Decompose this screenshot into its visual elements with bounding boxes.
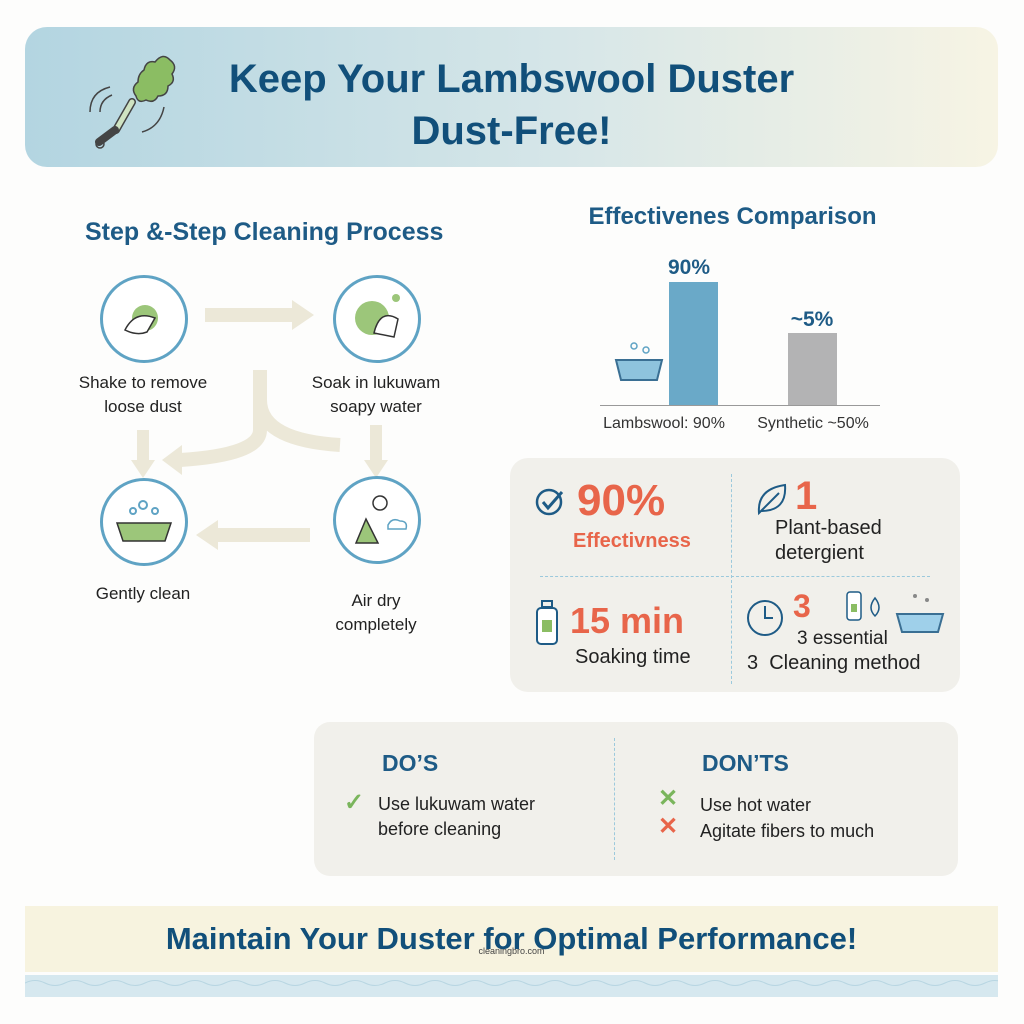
dos: ✓ [344,789,364,816]
step 4: air dry: Air dry [351,591,401,610]
panel: stats [510,458,960,692]
stat: 90%: 90% [577,476,665,525]
stat: 3 methods [747,588,944,674]
stat: 90% [536,476,691,552]
icon: basin [100,478,188,566]
stat: plant-based: Plant-based [775,517,882,539]
donts: DON’TS [702,750,789,776]
stat: 3 methods: 3 essential [797,628,888,649]
stat: 3 methods: 3 Cleaning method [747,652,920,674]
footer banner: cleaningbro.com [478,946,545,956]
decorative waves [25,975,998,997]
step 3: gently clean: Gently clean [96,584,190,603]
donts [658,750,874,841]
stat: 15 min: 15 min [570,600,684,641]
bar chart: 90% [668,256,710,279]
donts: ✕ [658,785,678,812]
stat: plant-based: detergient [775,542,864,564]
heading: comparison: Effectivenes Comparison [588,203,877,230]
bar chart: Synthetic ~50% [757,415,869,432]
bar chart: ~5% [791,308,833,331]
stat: 15 min: Soaking time [575,646,691,668]
stat: 3 methods: 3 [793,588,811,624]
donts: Agitate fibers to much [700,821,874,841]
icon: duster sun [333,476,421,564]
footer banner [25,906,998,972]
bar chart: Lambswool: 90% [603,415,725,432]
dos: DO’S [382,750,438,776]
footer banner: Maintain Your Duster for Optimal Performance! [166,921,857,956]
arrows: process flow [131,300,388,550]
step 1: shake: Shake to remove [79,373,207,392]
dos [344,750,535,839]
icon: duster [89,56,176,149]
step 2: soak [312,275,440,416]
step 4: air dry: completely [335,615,417,634]
icon: hand [100,275,188,363]
step 1: shake [79,275,207,416]
donts: ✕ [658,813,678,840]
step 4: air dry [333,476,421,634]
dos: before cleaning [378,819,501,839]
step 3: gently clean [96,478,190,603]
title: Keep Your Lambswool Duster [229,57,794,101]
heading: process: Step &-Step Cleaning Process [85,218,443,246]
donts: Use hot water [700,795,811,815]
step 2: soak: soapy water [330,397,422,416]
stat: 15 min [536,600,691,668]
icon: soapy hand [333,275,421,363]
stat: 90%: Effectivness [573,530,691,552]
panel: dos and donts [314,722,958,876]
bar chart [600,256,880,432]
icon: basin [614,342,664,381]
title: Dust-Free! [411,109,612,153]
title [229,57,794,153]
stat: plant-based: 1 [795,474,817,518]
step 1: shake: loose dust [104,397,182,416]
dos: Use lukuwam water [378,794,535,814]
stat: plant-based [758,474,882,564]
header banner [25,27,998,167]
step 2: soak: Soak in lukuwam [312,373,440,392]
